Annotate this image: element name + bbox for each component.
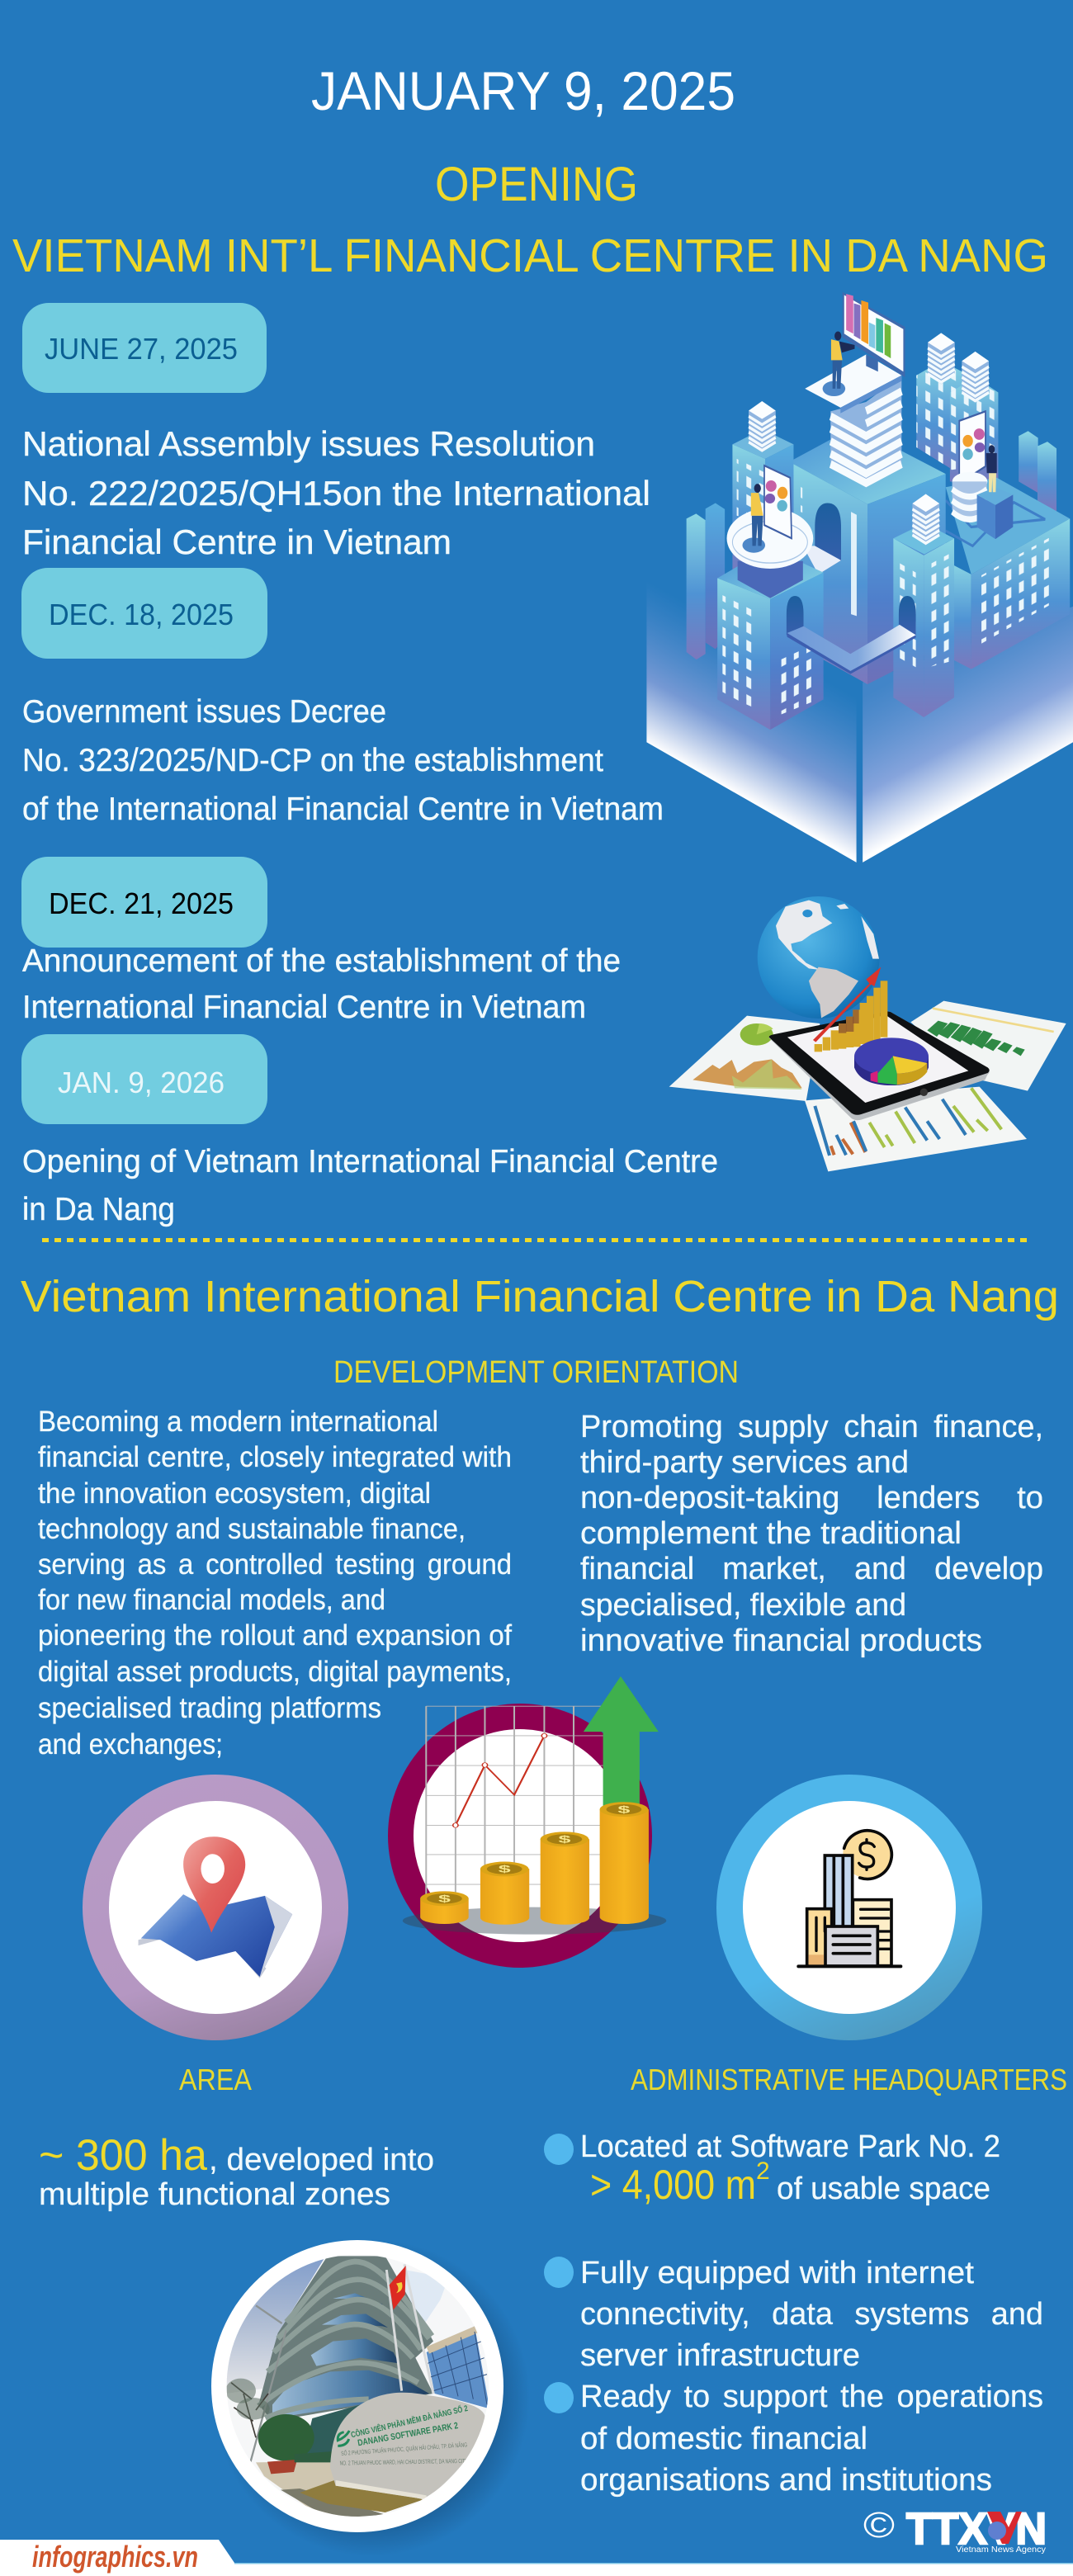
text: area figure [39, 2131, 434, 2212]
text: orientation left column: digital asset products, digital payments, [38, 1656, 512, 1688]
illustration: globe, tablet and reports [669, 896, 1066, 1171]
text: orientation left column: specialised trading platforms [38, 1692, 381, 1724]
bullet: connectivity: Fully equipped with internet [580, 2256, 974, 2290]
text: orientation left column: Becoming a modern international [38, 1406, 438, 1438]
bullet: support: of domestic financial [580, 2422, 867, 2456]
bullet: support [544, 2380, 1043, 2498]
date pill: Dec 21: DEC. 21, 2025 [49, 886, 234, 920]
text: orientation right column: financial market, and develop [580, 1552, 1043, 1586]
text: area figure: ~ 300 ha [39, 2131, 207, 2180]
date pill: Dec 21 [21, 857, 267, 948]
icon: office building with dollar coin [716, 1775, 982, 2040]
icon: growth chart with coins: $ [438, 1893, 451, 1904]
icon: location pin on map [83, 1775, 348, 2040]
text: orientation left column: the innovation ecosystem, digital [38, 1477, 431, 1510]
bullet: location and space: > 4,000 m [590, 2162, 756, 2208]
text: decree [22, 694, 664, 827]
logo: TTXVN: Vietnam News Agency [956, 2545, 1046, 2555]
text: orientation right column: third-party services and [580, 1445, 909, 1480]
text: orientation left column: pioneering the rollout and expansion of [38, 1619, 512, 1652]
text: resolution: Financial Centre in Vietnam [22, 522, 451, 561]
text: decree: No. 323/2025/ND-CP on the establishment [22, 743, 603, 778]
heading: development orientation: DEVELOPMENT ORIENTATION [333, 1355, 739, 1390]
icon: growth chart with coins: $ [499, 1864, 511, 1874]
dashed divider [42, 1238, 1031, 1242]
logo: infographics.vn: infographics.vn [32, 2540, 198, 2574]
text: orientation right column: specialised, flexible and [580, 1588, 906, 1623]
text: resolution: No. 222/2025/QH15on the International [22, 474, 650, 513]
text: orientation right column [580, 1410, 1043, 1658]
text: opening [22, 1144, 718, 1227]
title: opening: OPENING [435, 158, 638, 211]
title: main heading: VIETNAM INT’L FINANCIAL CENTRE IN DA NANG [12, 229, 1048, 282]
icon: growth chart with coins: $ [558, 1834, 571, 1845]
photo: Da Nang Software Park 2: CÔNG VIÊN PHẦN MỀM ĐÀ NẴNG SỐ 2 [350, 2402, 469, 2440]
bullet: connectivity [544, 2256, 1043, 2373]
text: announcement: International Financial Centre in Vietnam [22, 990, 586, 1025]
text: orientation left column [38, 1406, 512, 1761]
date pill: Jan 9: JAN. 9, 2026 [58, 1066, 225, 1099]
text: orientation left column: serving as a controlled testing ground [38, 1548, 512, 1581]
heading: centre name: Vietnam International Financial Centre in Da Nang [21, 1272, 1059, 1321]
bullet: support: Ready to support the operations [580, 2380, 1043, 2414]
bullet: location and space: Located at Software Park No. 2 [580, 2129, 1000, 2164]
bullet: location and space [544, 2129, 1000, 2208]
text: orientation right column: complement the traditional [580, 1516, 962, 1551]
bullet: connectivity: connectivity, data systems and [580, 2297, 1043, 2332]
text: decree: of the International Financial Centre in Vietnam [22, 792, 664, 827]
label: area: AREA [179, 2063, 252, 2096]
text: orientation left column: for new financial models, and [38, 1584, 385, 1616]
photo: Da Nang Software Park 2: DANANG SOFTWARE PARK 2 [357, 2421, 459, 2448]
text: opening: in Da Nang [22, 1192, 175, 1227]
bullet: location and space: of usable space [777, 2172, 990, 2206]
text: area figure: multiple functional zones [39, 2177, 390, 2212]
text: orientation right column: Promoting supply chain finance, [580, 1410, 1043, 1444]
text: orientation right column: innovative financial products [580, 1624, 982, 1658]
text: orientation left column: and exchanges; [38, 1728, 223, 1761]
bullet: support: organisations and institutions [580, 2463, 992, 2498]
date pill: Jan 9 [21, 1034, 267, 1124]
text: resolution: National Assembly issues Resolution [22, 424, 595, 463]
bullet: connectivity: server infrastructure [580, 2338, 860, 2373]
text: orientation left column: financial centre, closely integrated with [38, 1441, 512, 1473]
text: orientation right column: non-deposit-taking lenders to [580, 1481, 1043, 1515]
date pill: Dec 18: DEC. 18, 2025 [49, 598, 234, 631]
text: area figure: , developed into [209, 2143, 434, 2177]
illustration: isometric financial centre [646, 292, 1073, 863]
text: resolution [22, 424, 650, 561]
title: date: JANUARY 9, 2025 [311, 60, 735, 121]
text: announcement: Announcement of the establishment of the [22, 943, 621, 979]
photo: Da Nang Software Park 2: SỐ 2 PHƯỜNG THUẬN PHƯỚC, QUẬN HẢI CHÂU, TP. ĐÀ NẴNG [341, 2440, 468, 2457]
logo: TTXVN: © [863, 2505, 895, 2545]
bullet: location and space: 2 [756, 2158, 770, 2185]
icon: growth chart with coins: $ [617, 1804, 631, 1815]
photo: Da Nang Software Park 2: NO. 2 THUAN PHUOC WARD, HAI CHAU DISTRICT, DA NANG CITY [340, 2457, 468, 2467]
logo: TTXVN: TTXVN [906, 2504, 1047, 2554]
date pill: June 27: JUNE 27, 2025 [45, 332, 238, 366]
photo: Da Nang Software Park 2 [211, 2239, 530, 2556]
text: opening: Opening of Vietnam International Financial Centre [22, 1144, 718, 1179]
footer band [0, 2540, 1073, 2576]
text: orientation left column: technology and sustainable finance, [38, 1513, 466, 1545]
date pill: Dec 18 [21, 568, 267, 659]
date pill: June 27 [22, 303, 267, 393]
icon: growth chart with coins [388, 1676, 666, 1968]
text: announcement [22, 943, 621, 1025]
text: decree: Government issues Decree [22, 694, 386, 730]
